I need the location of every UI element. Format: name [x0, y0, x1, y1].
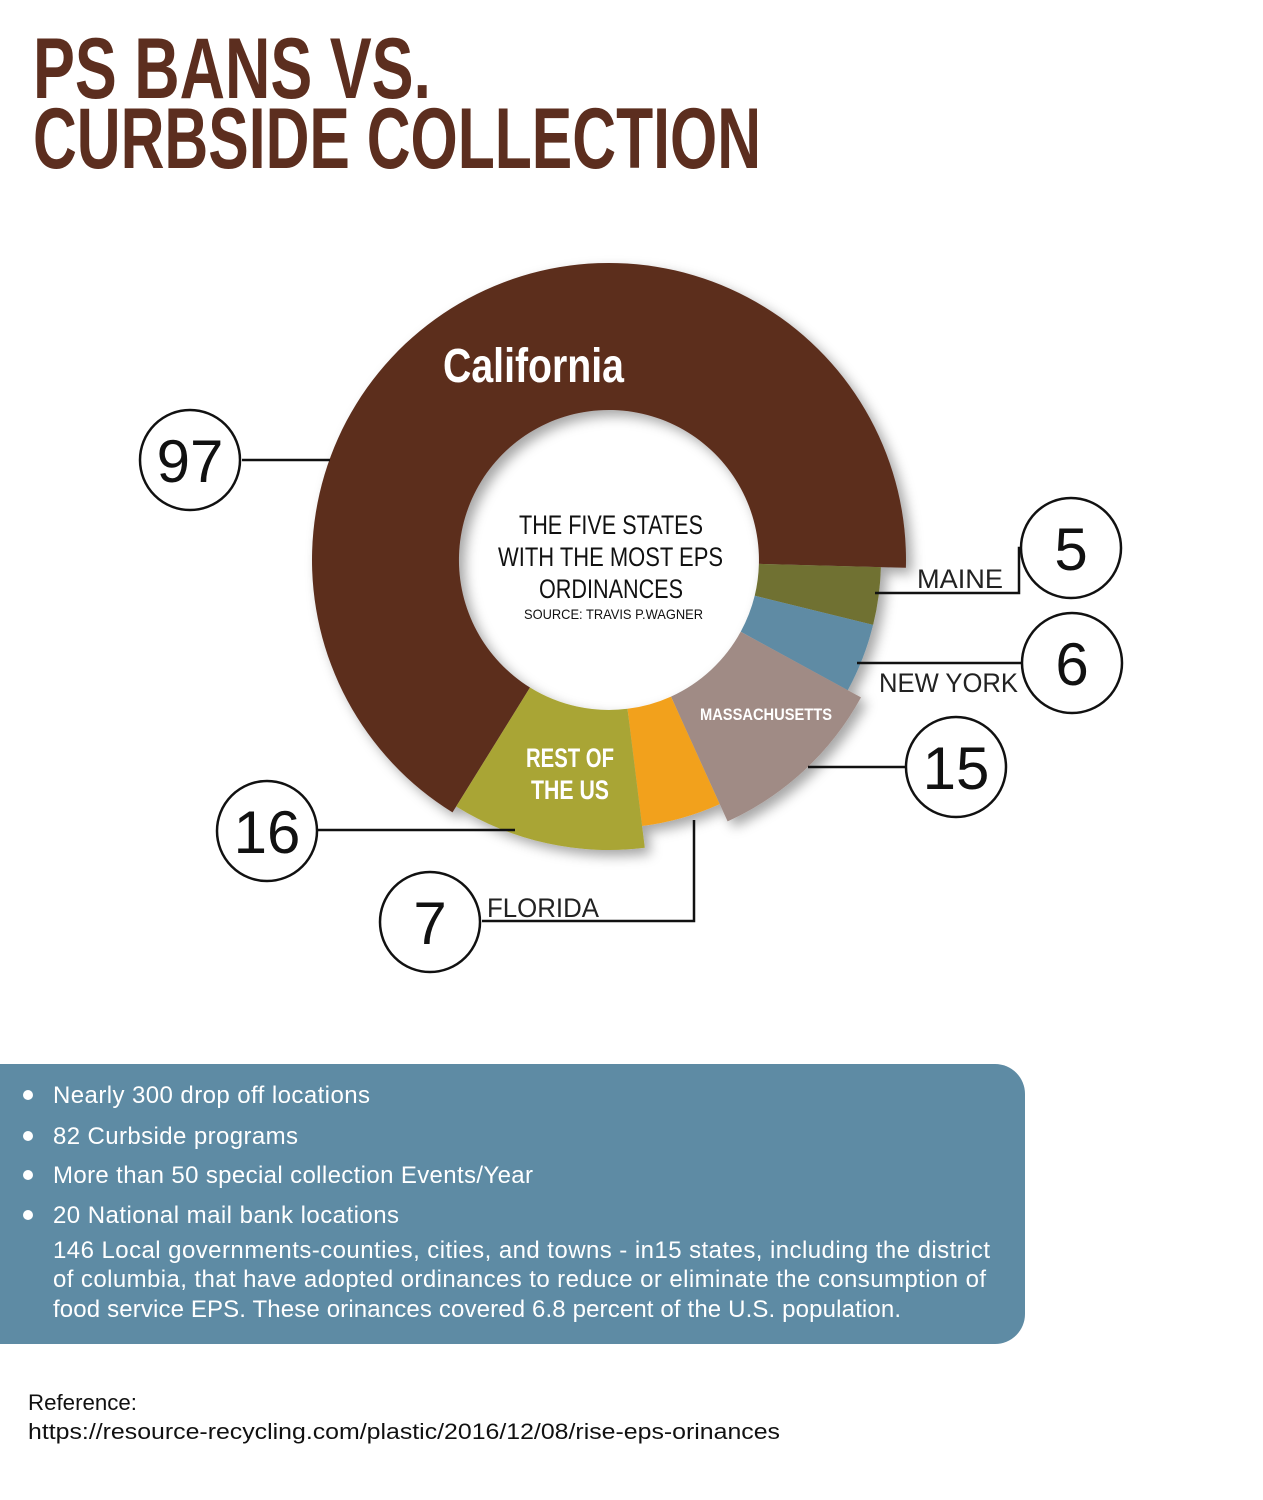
center text: SOURCE: TRAVIS P.WAGNER [524, 606, 703, 622]
info panel: Nearly 300 drop off locations [53, 1082, 370, 1109]
value numbers: 6 [1055, 631, 1089, 698]
value numbers: 7 [413, 890, 447, 957]
value numbers: 5 [1054, 516, 1088, 583]
info panel: More than 50 special collection Events/Year [53, 1162, 533, 1189]
title: CURBSIDE COLLECTION [33, 91, 761, 187]
info panel: of columbia, that have adopted ordinances to reduce or eliminate the consumption of [53, 1266, 986, 1293]
value numbers [157, 428, 1089, 957]
segment: Maine [755, 564, 881, 625]
segment labels: THE US [531, 775, 609, 805]
title: PS BANS VS. [33, 21, 431, 117]
info panel: 146 Local governments-counties, cities, and towns - in15 states, including the district [53, 1237, 990, 1264]
value numbers: 16 [234, 799, 300, 866]
segment: Massachusetts [671, 632, 861, 821]
center text: ORDINANCES [539, 574, 683, 604]
segment labels [443, 340, 832, 805]
info panel: food service EPS. These orinances covered 6.8 percent of the U.S. population. [53, 1296, 901, 1323]
state name labels: NEW YORK [879, 668, 1018, 698]
state name labels [487, 564, 1018, 923]
info panel: 82 Curbside programs [53, 1123, 298, 1150]
value circles [140, 410, 1122, 972]
donut chart [312, 263, 906, 850]
reference: https://resource-recycling.com/plastic/2016/12/08/rise-eps-orinances [28, 1419, 780, 1444]
title [33, 21, 761, 187]
info panel [0, 1064, 1025, 1344]
reference: Reference: [28, 1390, 137, 1415]
leader lines [242, 460, 1022, 921]
segment labels: MASSACHUSETTS [700, 705, 832, 724]
segment: Florida [628, 697, 720, 826]
state name labels: FLORIDA [487, 893, 599, 923]
center text: THE FIVE STATES [519, 510, 703, 540]
segment labels: California [443, 340, 624, 393]
segment: Rest of the US [456, 688, 645, 850]
segment labels: REST OF [526, 743, 614, 773]
state name labels: MAINE [917, 564, 1003, 594]
center text: WITH THE MOST EPS [498, 542, 723, 572]
value numbers: 97 [157, 428, 223, 495]
info panel: 20 National mail bank locations [53, 1202, 399, 1229]
segment: California [312, 263, 906, 812]
center text [498, 510, 723, 622]
segment: New York [741, 596, 873, 690]
value numbers: 15 [923, 735, 989, 802]
reference [28, 1390, 780, 1444]
